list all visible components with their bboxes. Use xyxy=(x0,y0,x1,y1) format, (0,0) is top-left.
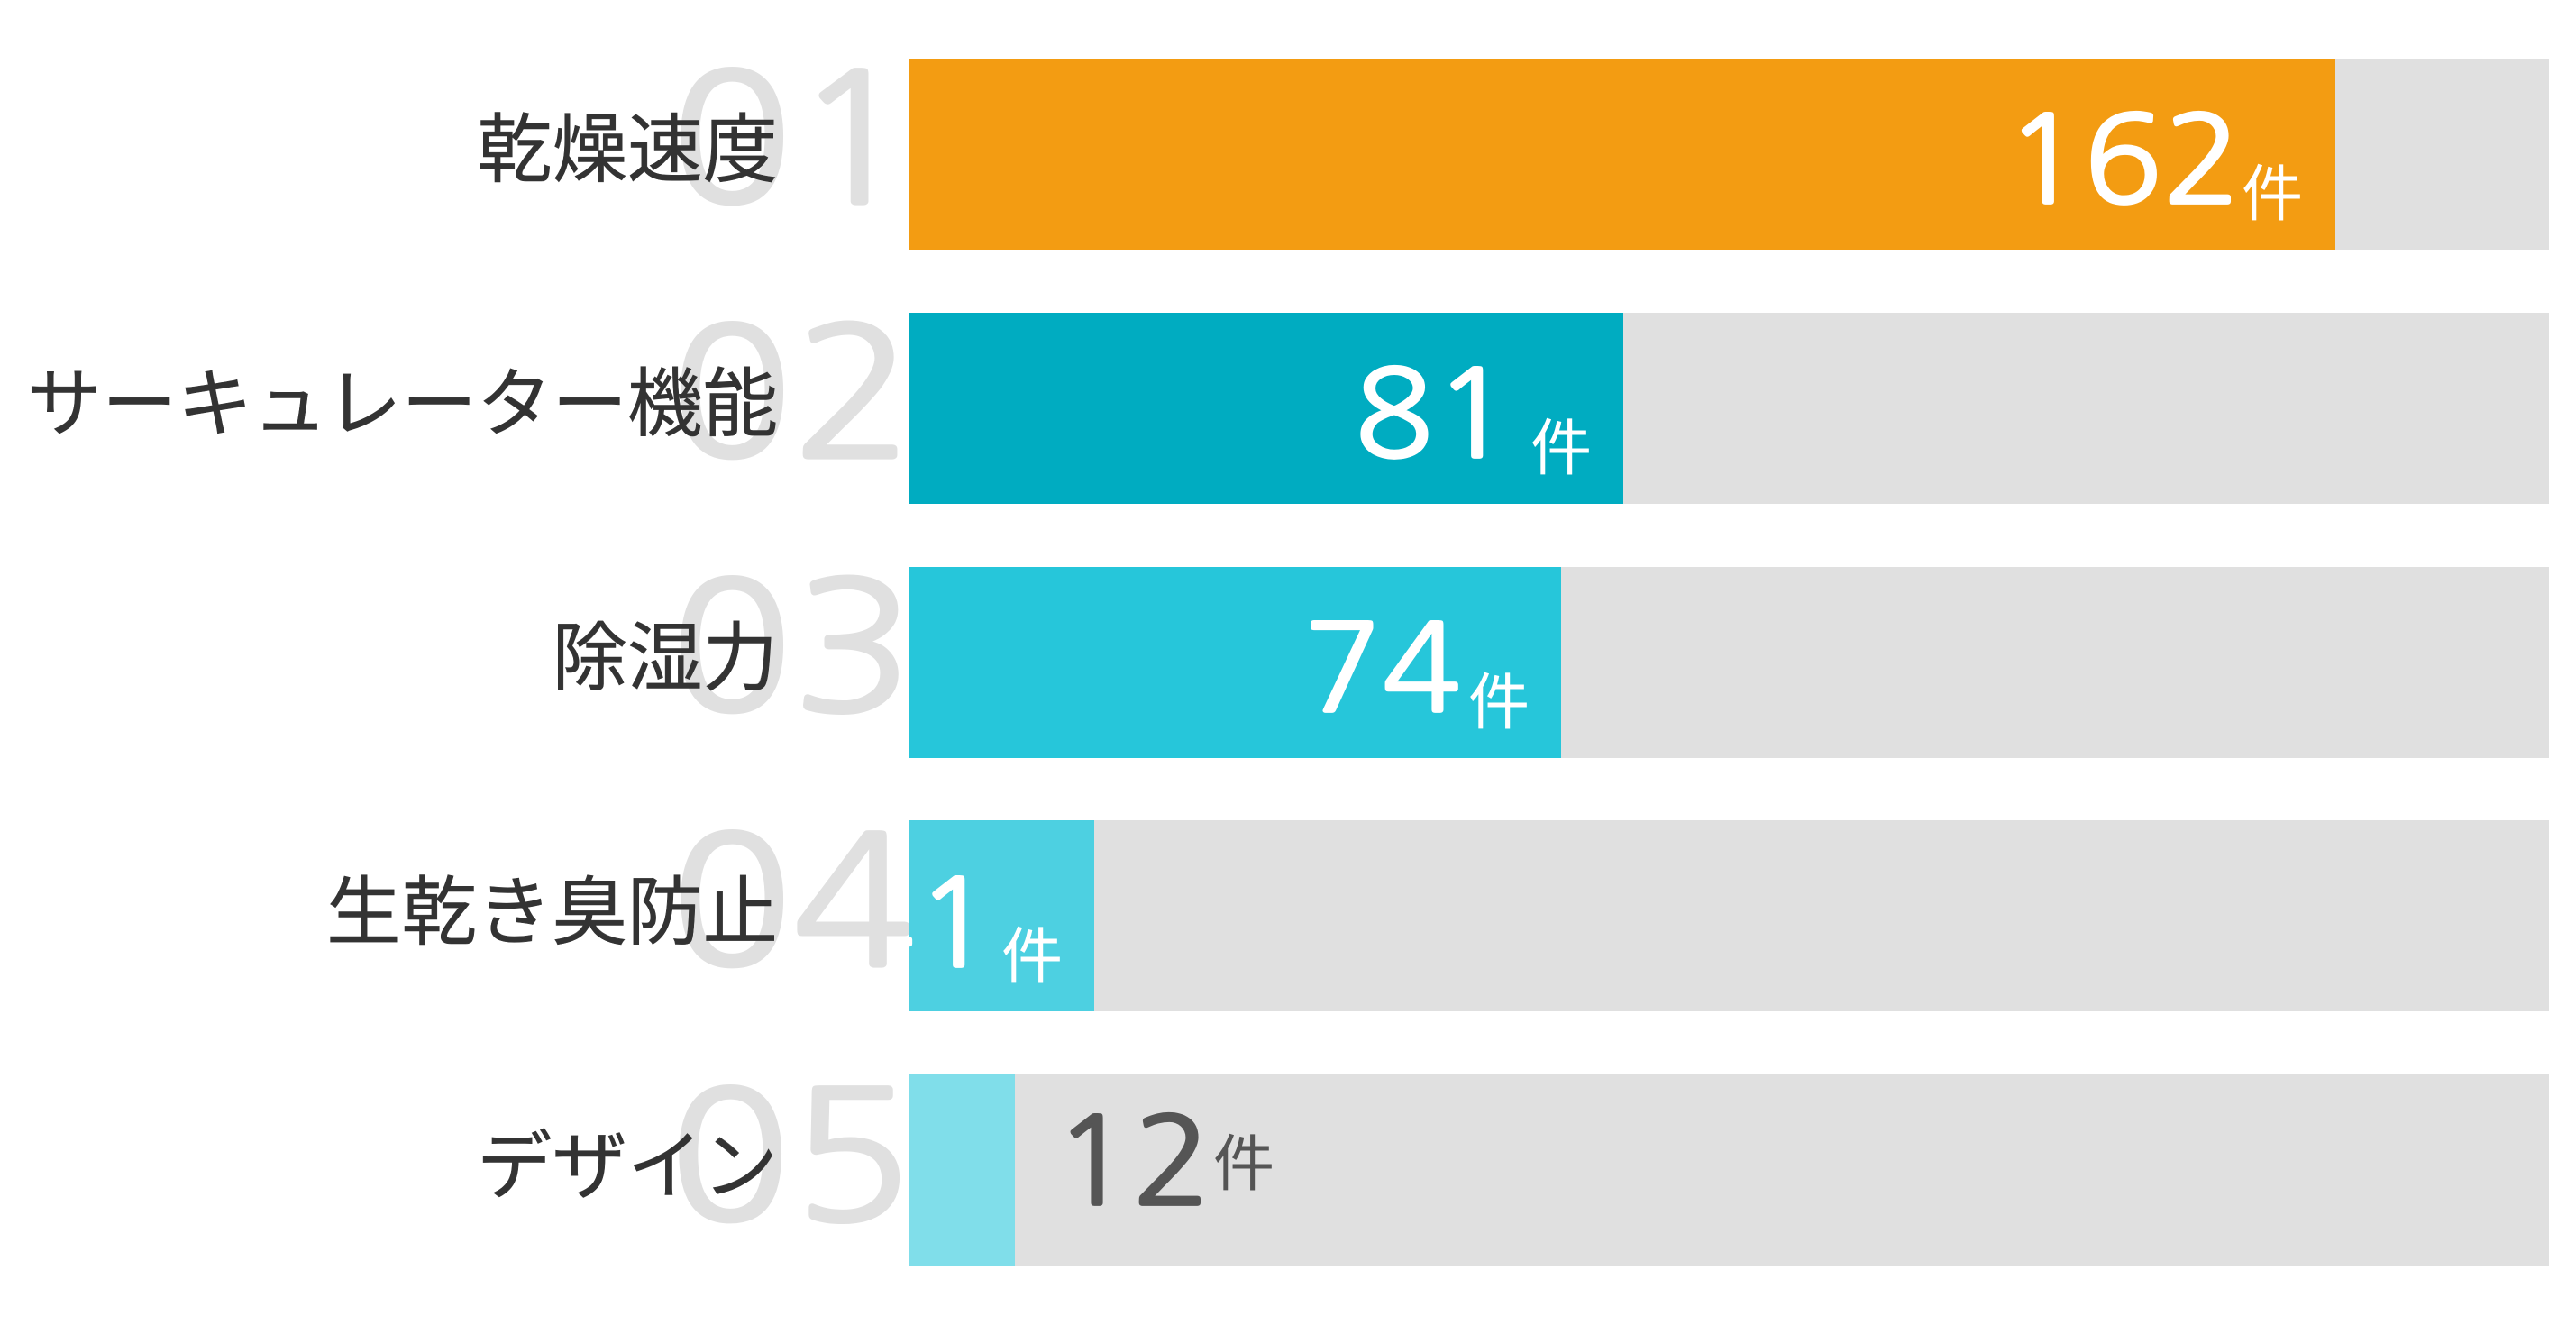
unit 1: 件 xyxy=(2242,144,2303,233)
unit 5: 件 xyxy=(1213,1114,1274,1203)
bar value 1 xyxy=(909,59,2335,250)
unit 4: 件 xyxy=(1001,907,1063,996)
label 2: サーキュレーター機能 xyxy=(27,343,778,452)
bar track 1 xyxy=(909,59,2549,250)
rank number 05: 05 xyxy=(669,1067,912,1247)
row 5: デザイン xyxy=(477,1067,2549,1266)
label 4: 生乾き臭防止 xyxy=(326,852,778,961)
value 81: 81 xyxy=(1355,355,1512,475)
bar value 4 xyxy=(909,820,1094,1011)
bar value 2 xyxy=(909,313,1623,504)
bar value 3 xyxy=(909,567,1561,758)
row 2: サーキュレーター機能 xyxy=(27,304,2549,504)
rank number 03: 03 xyxy=(671,558,914,737)
row 1: 乾燥速度 xyxy=(477,50,2549,250)
value 74: 74 xyxy=(1303,609,1461,729)
bar track 2 xyxy=(909,313,2549,504)
unit 3: 件 xyxy=(1468,653,1530,742)
rank number 01: 01 xyxy=(671,50,914,229)
bar track 5 xyxy=(909,1074,2549,1266)
label 1: 乾燥速度 xyxy=(477,89,778,198)
label 5: デザイン xyxy=(477,1106,778,1215)
label 3: 除湿力 xyxy=(552,598,778,707)
unit 2: 件 xyxy=(1530,398,1592,488)
bar track 4 xyxy=(909,820,2549,1011)
bar value 5 xyxy=(909,1074,1015,1266)
row 3: 除湿力 xyxy=(552,558,2549,758)
value 12: 12 xyxy=(1054,1102,1211,1222)
rank number 02: 02 xyxy=(671,304,914,483)
rank number 04: 04 xyxy=(671,812,914,991)
row 4: 生乾き臭防止 xyxy=(326,812,2549,1011)
value 41: 41 xyxy=(836,864,994,984)
bar track 3 xyxy=(909,567,2549,758)
value 162: 162 xyxy=(2005,101,2242,221)
